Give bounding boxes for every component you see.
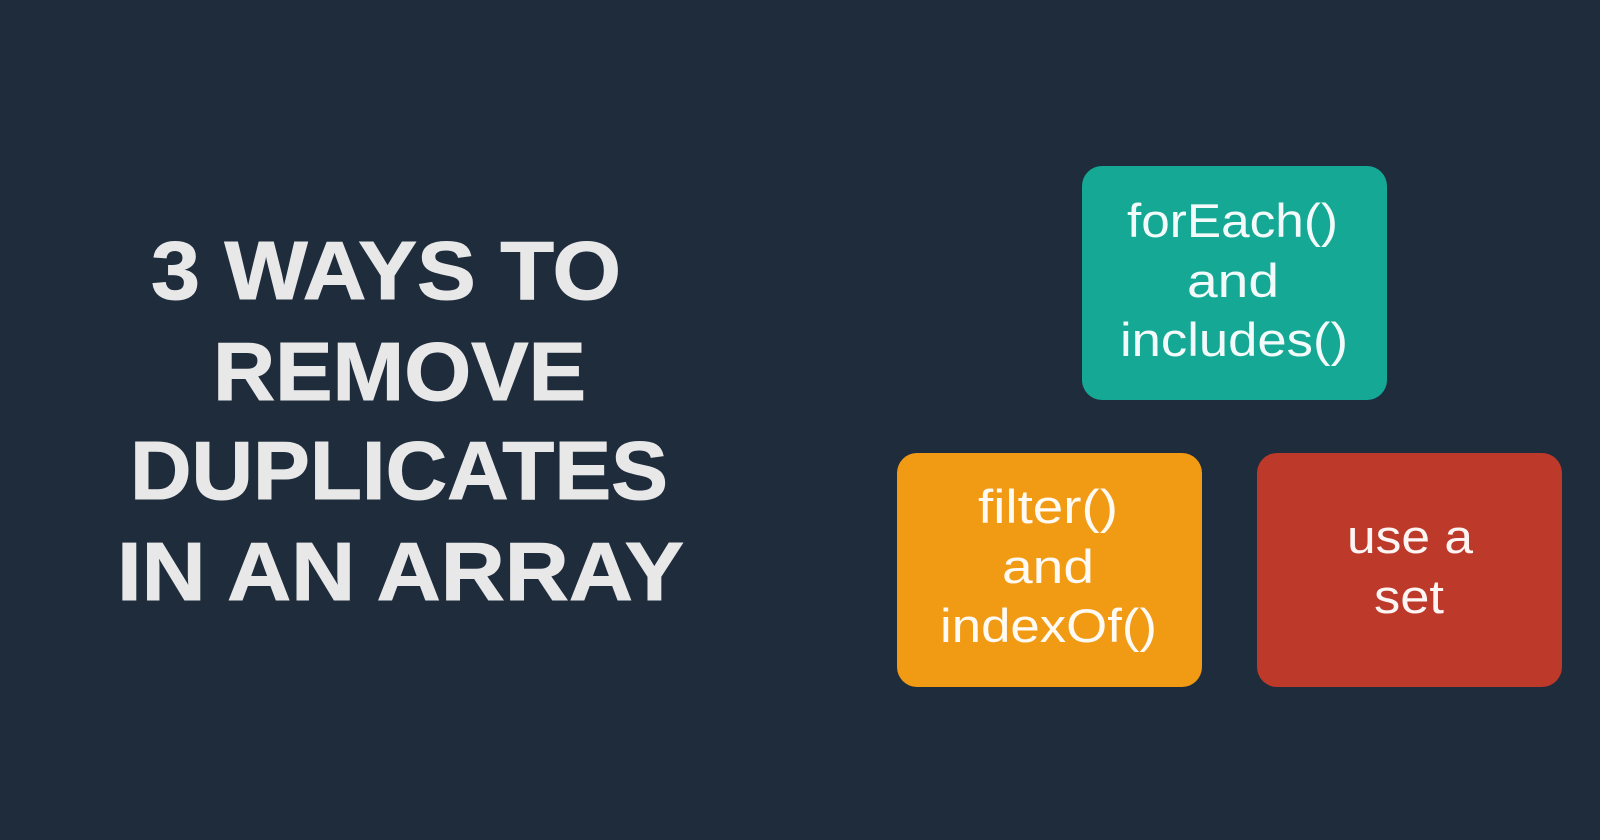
panel: use a set	[1257, 453, 1562, 687]
title: IN AN ARRAY	[117, 525, 684, 618]
panel: forEach and includes	[1082, 166, 1387, 400]
panel: filter and indexOf: indexOf()	[940, 599, 1157, 652]
panel: forEach and includes: and	[1187, 254, 1279, 307]
title: 3 WAYS TO	[151, 224, 621, 317]
panel: use a set: use a	[1347, 510, 1474, 563]
title: DUPLICATES	[130, 424, 668, 517]
panel: forEach and includes: forEach()	[1127, 194, 1338, 247]
title: REMOVE	[213, 325, 586, 418]
panel: filter and indexOf: and	[1002, 540, 1094, 593]
title	[117, 224, 684, 618]
panel: forEach and includes: includes()	[1120, 313, 1348, 366]
panel: filter and indexOf	[897, 453, 1202, 687]
panel: filter and indexOf: filter()	[978, 480, 1118, 533]
panel: use a set: set	[1374, 570, 1444, 623]
